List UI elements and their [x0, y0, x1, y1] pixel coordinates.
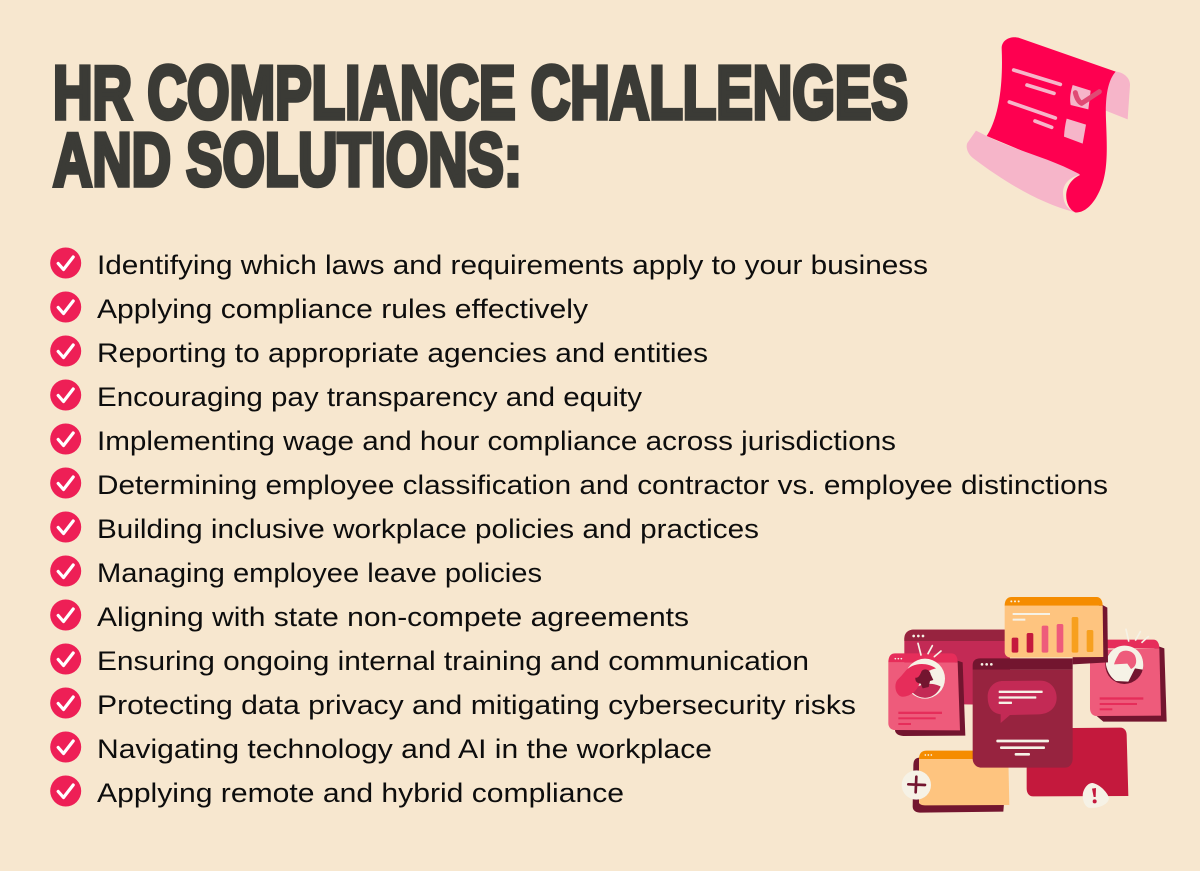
scroll bottom curl: [967, 131, 1080, 212]
item 7: Building inclusive workplace policies and practices: [97, 514, 759, 544]
item 13: Applying remote and hybrid compliance: [97, 778, 624, 808]
illustration: browser windows: [888, 597, 1167, 813]
caption lines: [996, 740, 1049, 756]
checklist: [50, 248, 1108, 808]
item 10: Ensuring ongoing internal training and communication: [97, 646, 809, 676]
bars: [1012, 638, 1018, 653]
item 5: Implementing wage and hour compliance across jurisdictions: [97, 426, 896, 456]
icon: plus badge: [902, 770, 931, 800]
avatar: [905, 659, 945, 699]
center speech window: [973, 658, 1073, 768]
orange window bottom: [913, 751, 1009, 813]
item 4: Encouraging pay transparency and equity: [97, 382, 643, 412]
checkbox checked: [1070, 85, 1091, 109]
item 3: Reporting to appropriate agencies and entities: [97, 338, 708, 368]
item 11: Protecting data privacy and mitigating cybersecurity risks: [97, 690, 856, 720]
sparkle lines: [918, 643, 941, 657]
left profile window: [888, 643, 965, 736]
text lines: [1100, 697, 1143, 710]
title: AND SOLUTIONS:: [53, 118, 522, 202]
item 9: Aligning with state non-compete agreements: [97, 602, 689, 632]
text lines: [898, 712, 942, 725]
title: [53, 51, 908, 202]
checkbox empty: [1064, 119, 1086, 144]
icon: alert badge: [1083, 783, 1109, 808]
check mark: [1075, 92, 1099, 103]
sparkle lines: [1126, 629, 1148, 642]
scroll top curl: [1106, 72, 1130, 119]
item 12: Navigating technology and AI in the workplace: [97, 734, 712, 764]
text lines: [1009, 70, 1060, 127]
red window: [1027, 728, 1128, 796]
right profile window: [1090, 629, 1167, 722]
speech bubble: [988, 681, 1057, 723]
back window wide: [904, 630, 1010, 705]
avatar: [1105, 646, 1143, 684]
icon: checklist scroll: [967, 37, 1130, 212]
chart window: [1005, 597, 1108, 664]
item 6: Determining employee classification and contractor vs. employee distinctions: [97, 470, 1108, 500]
item 1: Identifying which laws and requirements apply to your business: [97, 250, 928, 280]
item 8: Managing employee leave policies: [97, 558, 542, 588]
title: HR COMPLIANCE CHALLENGES: [53, 51, 908, 135]
item 2: Applying compliance rules effectively: [97, 294, 589, 324]
scroll body: [987, 37, 1116, 212]
